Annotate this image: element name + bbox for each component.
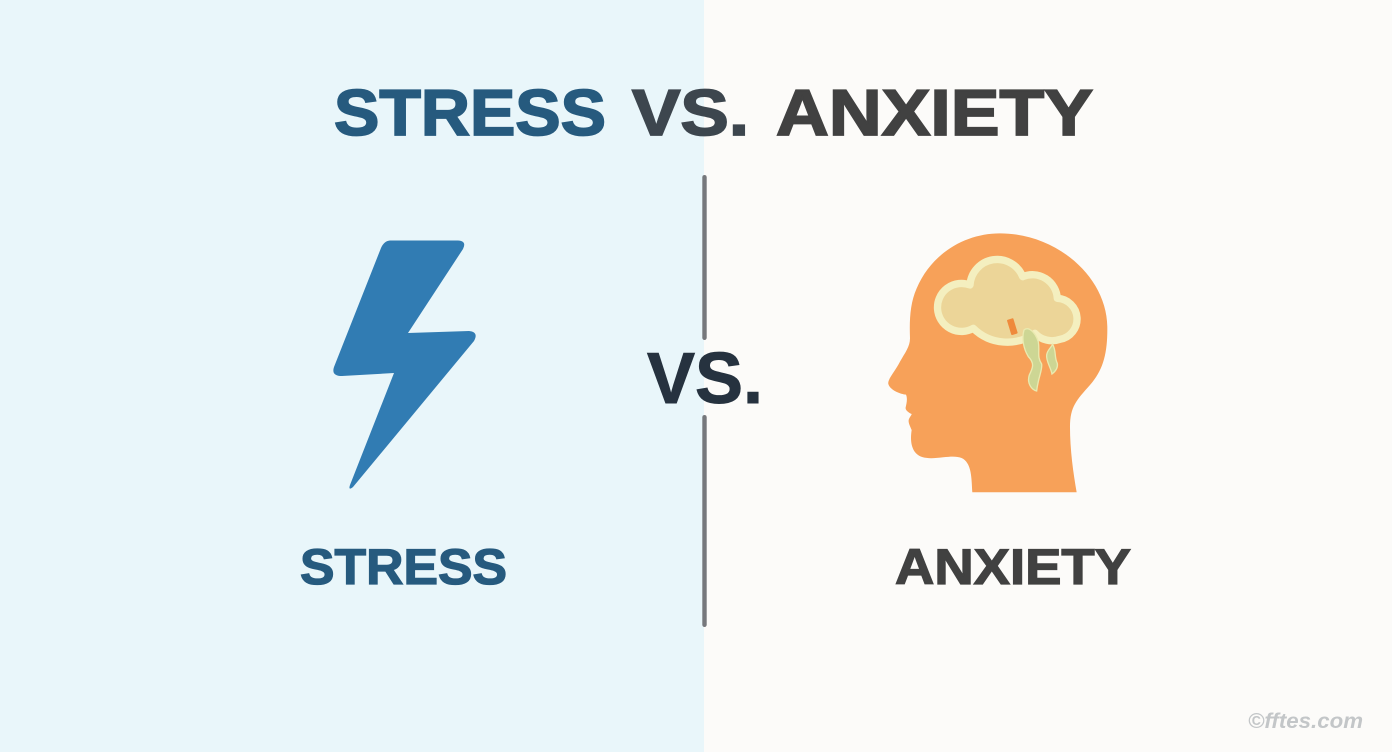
cloud: small orange bolt	[1007, 318, 1018, 335]
title	[334, 76, 1093, 149]
watermark: ©fftes.com	[1248, 710, 1363, 733]
steam wisp right	[1047, 344, 1057, 374]
panel: stress background	[0, 0, 704, 752]
icon: lightning bolt	[333, 240, 476, 489]
divider: upper line	[702, 175, 707, 340]
steam wisp left	[1023, 329, 1042, 391]
cloud	[938, 259, 1077, 342]
icon: head with storm cloud	[888, 233, 1107, 492]
title: STRESS	[334, 76, 606, 149]
anxiety label: ANXIETY	[895, 539, 1131, 595]
center VS. label: VS.	[647, 339, 763, 419]
title: VS.	[632, 76, 749, 149]
head silhouette	[888, 233, 1107, 492]
stress label: STRESS	[300, 539, 507, 595]
panel: anxiety background	[704, 0, 1392, 752]
divider: lower line	[702, 415, 707, 627]
title: ANXIETY	[776, 76, 1093, 149]
